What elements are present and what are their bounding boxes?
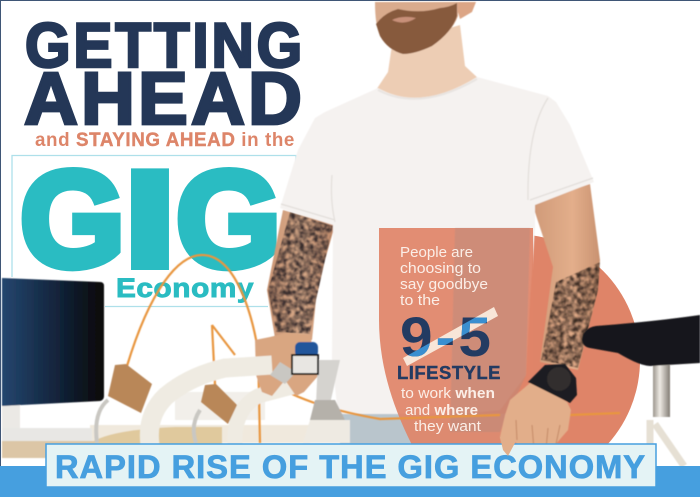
seat post bbox=[653, 365, 670, 417]
second handlebar tape bbox=[235, 385, 300, 445]
head tube bbox=[303, 420, 350, 443]
right arm bbox=[532, 184, 600, 370]
stem clamp bbox=[292, 355, 318, 374]
beard bbox=[376, 3, 457, 54]
intro copy: People are bbox=[400, 245, 473, 261]
title: getting ahead: AHEAD bbox=[24, 57, 305, 140]
wall panel bbox=[175, 392, 265, 420]
title: getting ahead: GETTING bbox=[25, 11, 305, 81]
watch bbox=[528, 364, 577, 403]
stem bbox=[316, 360, 340, 404]
nine to five: 9-5 bbox=[400, 305, 494, 368]
right arm tattoo bbox=[540, 262, 602, 370]
desk left bbox=[2, 441, 94, 458]
wooden desk curve bbox=[88, 427, 222, 445]
shirt collar bbox=[378, 79, 477, 99]
top tube tint bbox=[379, 418, 650, 434]
intro copy: choosing to bbox=[400, 261, 481, 277]
gig heading bbox=[20, 143, 281, 295]
left hand back fingers bbox=[255, 333, 318, 396]
tshirt bbox=[280, 77, 594, 418]
bottom blue band bbox=[0, 466, 700, 497]
lips bbox=[392, 17, 416, 23]
neck bbox=[376, 25, 480, 108]
intro copy bbox=[400, 245, 488, 309]
saddle bbox=[582, 315, 700, 366]
gig heading: I bbox=[124, 143, 176, 295]
left arm tattoo bbox=[266, 210, 336, 336]
first handlebar tape bbox=[149, 365, 272, 445]
closing copy: to work when bbox=[401, 386, 495, 402]
bar end bbox=[270, 362, 296, 384]
sleeve seam right bbox=[528, 98, 593, 200]
finger shadows bbox=[516, 420, 560, 450]
gig title frame bbox=[12, 156, 296, 306]
right hand bbox=[500, 383, 571, 455]
photo: desk and computer bbox=[2, 278, 310, 458]
orange text panel bbox=[379, 228, 533, 445]
face bbox=[375, 2, 458, 54]
head collars bbox=[310, 400, 345, 420]
computer monitor bbox=[2, 278, 104, 406]
desk surface bbox=[90, 425, 310, 443]
strike blue bbox=[408, 318, 487, 356]
bike top tube bbox=[332, 418, 650, 434]
jeans bbox=[340, 414, 510, 444]
intro copy: to the bbox=[400, 293, 440, 309]
shirt shadow on panel bbox=[450, 228, 530, 432]
keyboard bbox=[2, 428, 92, 441]
closing copy: they want bbox=[414, 419, 481, 435]
computer stand bbox=[2, 405, 20, 429]
orange brake cable bbox=[127, 255, 620, 443]
banner heading: RAPID RISE OF THE GIG ECONOMY bbox=[55, 449, 646, 485]
section banner bbox=[46, 444, 656, 487]
blue stem cap bbox=[295, 342, 318, 357]
fingertip over banner bbox=[500, 437, 516, 456]
photo: man bbox=[266, 2, 602, 444]
panel text bbox=[397, 245, 501, 435]
intro copy: say goodbye bbox=[400, 277, 488, 293]
brake levers bbox=[96, 400, 200, 443]
lifestyle: LIFESTYLE bbox=[397, 362, 501, 383]
watch dial bbox=[547, 367, 571, 391]
gig heading: G bbox=[176, 143, 281, 295]
ear bbox=[455, 2, 476, 19]
subtitle: and STAYING AHEAD in the bbox=[35, 130, 295, 151]
left arm bbox=[267, 210, 335, 340]
closing copy bbox=[401, 386, 495, 435]
strike beige bbox=[403, 307, 498, 366]
economy heading: Economy bbox=[116, 273, 254, 303]
brake hoods bbox=[108, 364, 237, 424]
frame tubes bbox=[650, 420, 684, 466]
gig heading: G bbox=[20, 143, 125, 295]
sleeve seam left bbox=[281, 175, 335, 222]
closing copy: and where bbox=[405, 403, 478, 419]
orange circle bbox=[388, 234, 640, 486]
banner box bbox=[46, 444, 656, 487]
photo: bicycle bbox=[96, 255, 700, 466]
title: getting ahead bbox=[24, 11, 305, 140]
